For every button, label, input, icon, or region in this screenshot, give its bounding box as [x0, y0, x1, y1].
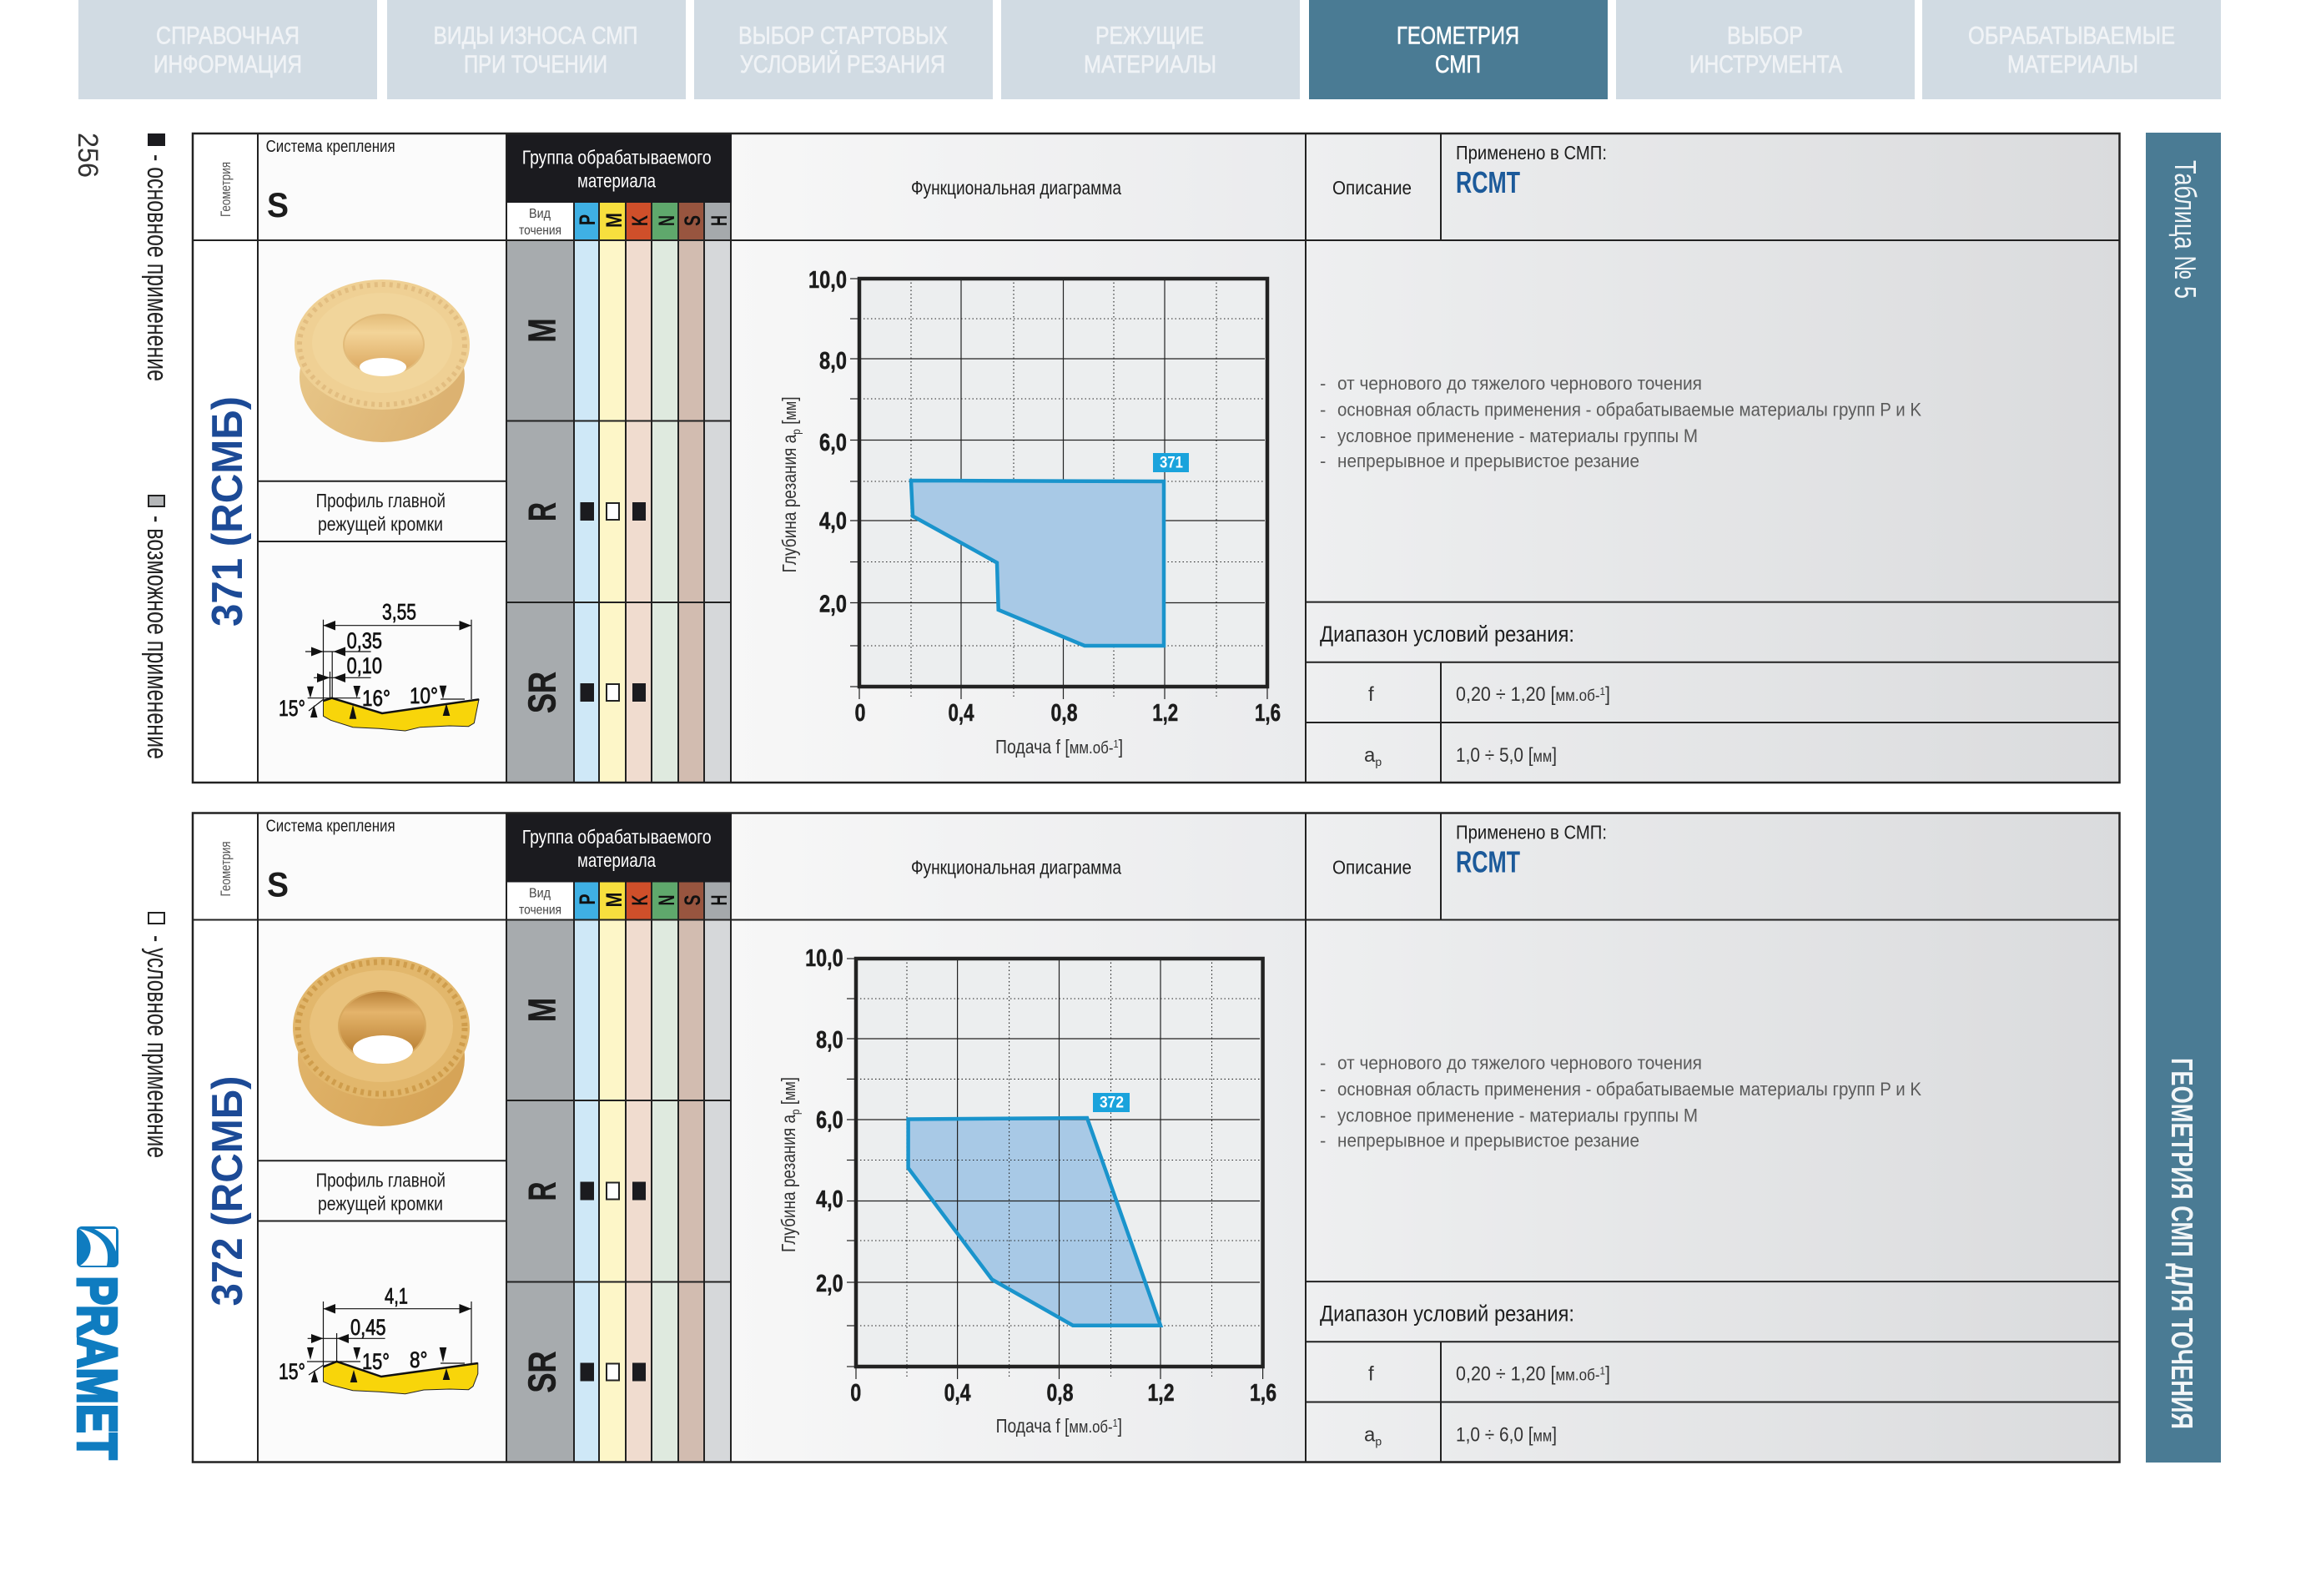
- turning type header: точения: [519, 224, 561, 238]
- applied to inserts: RCMT: [1456, 844, 1520, 879]
- tab: геометрия смп (active): [1309, 0, 1608, 99]
- depth range row: 1,0 ÷ 5,0 [мм]: [1456, 744, 1557, 767]
- cutting edge profile 371: 0,10: [347, 653, 382, 678]
- applied to inserts: RCMT: [1456, 165, 1520, 199]
- tab: выбор инструмента: ВЫБОР: [1727, 22, 1803, 50]
- material color columns: [506, 919, 731, 1462]
- depth range row: p: [1375, 1435, 1382, 1448]
- chart 371: 0,4: [948, 700, 974, 727]
- chart 371: 10,0: [808, 267, 847, 294]
- material group header: материала: [577, 849, 656, 871]
- description bullets: -: [1320, 1130, 1326, 1151]
- description bullets: -: [1320, 451, 1326, 471]
- depth range row: 1,0 ÷ 6,0 [мм]: [1456, 1423, 1557, 1447]
- y axis title: p: [789, 429, 803, 435]
- chart 372: 8,0: [816, 1027, 843, 1054]
- cutting edge profile 372: 4,1: [385, 1284, 408, 1309]
- legend: conditional application: - условное применение: [141, 935, 173, 1158]
- geometry label: Геометрия: [218, 162, 234, 217]
- cutting edge profile 372: [279, 1284, 478, 1394]
- profile caption: [316, 1170, 446, 1215]
- chart 372: 2,0: [816, 1271, 843, 1297]
- description bullets: основная область применения - обрабатываемые материалы групп P и K: [1337, 1079, 1921, 1100]
- cutting edge profile 371: [279, 599, 479, 731]
- legend: main application: - основное применение: [141, 154, 173, 381]
- label 372: 372: [1100, 1095, 1124, 1111]
- legend: possible application: [141, 496, 173, 759]
- tab: обрабатываемые материалы: МАТЕРИАЛЫ: [2007, 51, 2138, 78]
- description bullets: непрерывное и прерывистое резание: [1337, 1130, 1639, 1151]
- insert photo 372: [293, 957, 470, 1126]
- chart 372: [778, 945, 1276, 1437]
- chart 372: 10,0: [805, 945, 843, 972]
- page number: 256: [72, 133, 103, 178]
- turning type header: [506, 883, 574, 919]
- profile caption: режущей кромки: [318, 513, 443, 535]
- legend: main application: [141, 133, 173, 381]
- description bullets: условное применение - материалы группы M: [1337, 1105, 1698, 1126]
- cutting edge profile 371: 10°: [410, 683, 438, 708]
- chart 372: 6,0: [816, 1107, 843, 1134]
- y axis title: Глубина резания a: [778, 1085, 799, 1252]
- material letters: S: [680, 894, 705, 906]
- cutting edge profile 372: 15°: [362, 1349, 390, 1374]
- material letters: [574, 203, 732, 240]
- x axis title: Подача f [мм.об-: [995, 736, 1121, 758]
- turning type M: M: [521, 319, 564, 342]
- x axis title: ]: [1118, 1415, 1122, 1437]
- cutting edge profile 372: 8°: [410, 1347, 427, 1372]
- depth range row: a: [1364, 744, 1375, 767]
- cutting edge profile 371: 16°: [362, 686, 390, 711]
- material color columns: [506, 240, 731, 783]
- material letters: N: [654, 894, 679, 906]
- applied to inserts: Применено в СМП:: [1456, 821, 1607, 843]
- description bullets: -: [1320, 1105, 1326, 1126]
- x axis title: 1: [1113, 738, 1119, 750]
- material group header: [506, 133, 732, 203]
- description bullets: -: [1320, 399, 1326, 420]
- insert photo 371: [295, 279, 470, 442]
- y axis title: p: [788, 1109, 802, 1115]
- description bullets: от чернового до тяжелого чернового точения: [1337, 1053, 1702, 1073]
- cutting edge profile 372: 0,45: [350, 1315, 385, 1340]
- feed range row: f: [1368, 1363, 1374, 1385]
- clamping system: Система крепления: [266, 138, 395, 156]
- description bullets: условное применение - материалы группы M: [1337, 425, 1698, 446]
- depth range row: a: [1364, 1423, 1375, 1447]
- applied to inserts: Применено в СМП:: [1456, 142, 1607, 164]
- chart 371: 0,8: [1051, 700, 1078, 727]
- feed range row: f: [1368, 683, 1374, 706]
- description bullets: непрерывное и прерывистое резание: [1337, 451, 1639, 471]
- tab: виды износа: ВИДЫ ИЗНОСА СМП: [434, 22, 637, 50]
- tab: режущие материалы: [1001, 0, 1300, 99]
- material group header: [506, 813, 732, 883]
- chart 371: [778, 267, 1281, 758]
- cutting conditions heading: Диапазон условий резания:: [1320, 1301, 1574, 1327]
- table 1: geometry 371: [193, 133, 2119, 783]
- turning type header: Вид: [529, 886, 551, 901]
- cutting conditions heading: Диапазон условий резания:: [1320, 622, 1574, 647]
- navigation tabs: [78, 0, 2221, 99]
- label 371: [1153, 453, 1189, 472]
- cutting edge profile 372: 15°: [279, 1359, 305, 1384]
- title: 372 (RCMБ): 372 (RCMБ): [204, 1076, 252, 1307]
- material group header: Группа обрабатываемого: [522, 826, 712, 848]
- tab: справочная информация: ИНФОРМАЦИЯ: [154, 51, 302, 78]
- turning type R row: R: [521, 502, 564, 521]
- feed range row: ]: [1605, 683, 1610, 706]
- profile caption: Профиль главной: [316, 1170, 446, 1191]
- description bullets: [1320, 373, 1921, 471]
- yellow edge section: [324, 1362, 478, 1394]
- feed range row: [1368, 683, 1610, 706]
- y axis title: [: [778, 1100, 799, 1110]
- chart 372: 0,8: [1046, 1380, 1073, 1407]
- y axis title: [: [778, 420, 800, 429]
- turning type SR row: SR: [521, 672, 564, 713]
- depth range row: p: [1375, 755, 1382, 768]
- feed range row: ]: [1605, 1363, 1610, 1385]
- turning type header: точения: [519, 903, 561, 918]
- material letters: N: [654, 215, 679, 226]
- right side bar: [2146, 133, 2221, 1463]
- description bullets: от чернового до тяжелого чернового точения: [1337, 373, 1702, 394]
- clamping system: [266, 818, 395, 904]
- clamping system: S: [267, 185, 289, 224]
- x axis title: Подача f [мм.об-: [996, 1415, 1121, 1437]
- table 2: geometry 372: [193, 813, 2119, 1462]
- depth range row: [1364, 744, 1557, 768]
- chart 372: 0,4: [944, 1380, 971, 1407]
- turning type SR row: SR: [521, 1352, 564, 1393]
- turning type SR row: [521, 672, 646, 713]
- profile caption: Профиль главной: [316, 490, 446, 511]
- tab: выбор стартовых условий: ВЫБОР СТАРТОВЫХ: [738, 22, 948, 50]
- chart 371: 4,0: [819, 508, 847, 535]
- yellow edge section: [324, 698, 479, 731]
- applied to inserts: [1456, 142, 1607, 199]
- material letters: M: [602, 213, 627, 228]
- geometry label: Геометрия: [218, 841, 234, 896]
- chart 371: 2,0: [819, 591, 847, 617]
- chart 371: 8,0: [819, 348, 847, 375]
- tab: выбор стартовых условий: [694, 0, 993, 99]
- side label: table number: Таблица № 5: [2168, 160, 2203, 299]
- logo icon: [78, 1227, 118, 1266]
- turning type R row: [521, 1181, 646, 1201]
- logo: PRAMET: [65, 1227, 128, 1460]
- y axis title: Глубина резания a: [778, 406, 800, 572]
- tab: виды износа: ПРИ ТОЧЕНИИ: [464, 51, 607, 78]
- feed range row: 0,20 ÷ 1,20 [мм.об-: [1456, 1363, 1605, 1385]
- working area outline 372: [909, 1118, 1161, 1326]
- cutting edge profile 371: 15°: [279, 696, 305, 721]
- label 372: [1093, 1093, 1130, 1112]
- tab: виды износа: [387, 0, 686, 99]
- cutting edge profile 371: 0,35: [347, 628, 382, 653]
- tab: геометрия смп (active): СМП: [1435, 51, 1481, 78]
- profile caption: режущей кромки: [318, 1193, 443, 1215]
- clamping system: Система крепления: [266, 818, 395, 836]
- feed range row: 0,20 ÷ 1,20 [мм.об-: [1456, 683, 1605, 706]
- functional diagram heading: Функциональная диаграмма: [911, 177, 1121, 199]
- material letters: K: [627, 894, 652, 906]
- working area fill 372: [909, 1118, 1161, 1326]
- x axis title: 1: [1113, 1417, 1118, 1429]
- legend: conditional application: [141, 913, 173, 1158]
- description bullets: основная область применения - обрабатываемые материалы групп P и K: [1337, 399, 1921, 420]
- material letters: K: [627, 215, 652, 226]
- description heading: Описание: [1332, 177, 1412, 199]
- functional diagram heading: Функциональная диаграмма: [911, 856, 1121, 878]
- material letters: M: [602, 893, 627, 908]
- feed range row: 1: [1600, 1365, 1605, 1377]
- x axis title: ]: [1119, 736, 1123, 758]
- chart 372: 4,0: [816, 1186, 843, 1213]
- chart 371: 1,6: [1255, 700, 1281, 727]
- applied to inserts: [1456, 821, 1607, 879]
- chart 371: 6,0: [819, 430, 847, 456]
- clamping system: [266, 138, 395, 224]
- chart 372: 1,2: [1148, 1380, 1175, 1407]
- turning type R row: R: [521, 1181, 564, 1201]
- tab: режущие материалы: МАТЕРИАЛЫ: [1084, 51, 1216, 78]
- legend: possible application: - возможное применение: [141, 516, 173, 759]
- working area polygon 371: [911, 481, 1164, 646]
- material letters: H: [707, 215, 732, 226]
- tab: обрабатываемые материалы: [1922, 0, 2221, 99]
- turning type R row: [521, 502, 646, 521]
- cutting edge profile 371: 3,55: [382, 599, 416, 624]
- tab: выбор стартовых условий: УСЛОВИЙ РЕЗАНИЯ: [740, 50, 945, 78]
- description heading: Описание: [1332, 856, 1412, 878]
- tab: режущие материалы: РЕЖУЩИЕ: [1095, 22, 1204, 50]
- profile caption: [316, 490, 446, 535]
- material letters: H: [707, 894, 732, 906]
- turning type header: [506, 203, 574, 240]
- side label: section title: ГЕОМЕТРИЯ СМП ДЛЯ ТОЧЕНИЯ: [2165, 1058, 2199, 1429]
- title: 371 (RCMБ): 371 (RCMБ): [204, 396, 252, 627]
- material letters: [574, 883, 732, 919]
- tab: выбор инструмента: [1616, 0, 1915, 99]
- description bullets: -: [1320, 373, 1326, 394]
- tab: выбор инструмента: ИНСТРУМЕНТА: [1689, 51, 1842, 78]
- chart 371: 0: [854, 700, 866, 727]
- description bullets: -: [1320, 1053, 1326, 1073]
- tab: обрабатываемые материалы: ОБРАБАТЫВАЕМЫЕ: [1968, 22, 2175, 50]
- material group header: материала: [577, 170, 656, 192]
- turning type header: Вид: [529, 207, 551, 221]
- material letters: P: [575, 214, 600, 225]
- material group header: Группа обрабатываемого: [522, 147, 712, 169]
- turning type SR row: [521, 1352, 646, 1393]
- tab: справочная информация: СПРАВОЧНАЯ: [156, 22, 300, 50]
- material letters: P: [575, 894, 600, 904]
- legend: [141, 133, 173, 1158]
- description bullets: -: [1320, 1079, 1326, 1100]
- chart 371: 1,2: [1152, 700, 1178, 727]
- tab: геометрия смп (active): ГЕОМЕТРИЯ: [1397, 22, 1519, 50]
- description bullets: [1320, 1053, 1921, 1151]
- clamping system: S: [267, 864, 289, 904]
- y axis title: мм]: [778, 395, 800, 420]
- feed range row: [1368, 1363, 1610, 1385]
- chart 372: 0: [850, 1380, 861, 1407]
- logo wordmark: PRAMET: [65, 1276, 128, 1460]
- chart 372: 1,6: [1250, 1380, 1276, 1407]
- description bullets: -: [1320, 425, 1326, 446]
- y axis title: мм]: [778, 1076, 799, 1100]
- label 371: 371: [1160, 454, 1183, 472]
- material letters: S: [680, 215, 705, 226]
- turning type M: M: [521, 998, 564, 1022]
- tab: справочная информация: [78, 0, 377, 99]
- depth range row: [1364, 1423, 1557, 1448]
- feed range row: 1: [1600, 685, 1605, 697]
